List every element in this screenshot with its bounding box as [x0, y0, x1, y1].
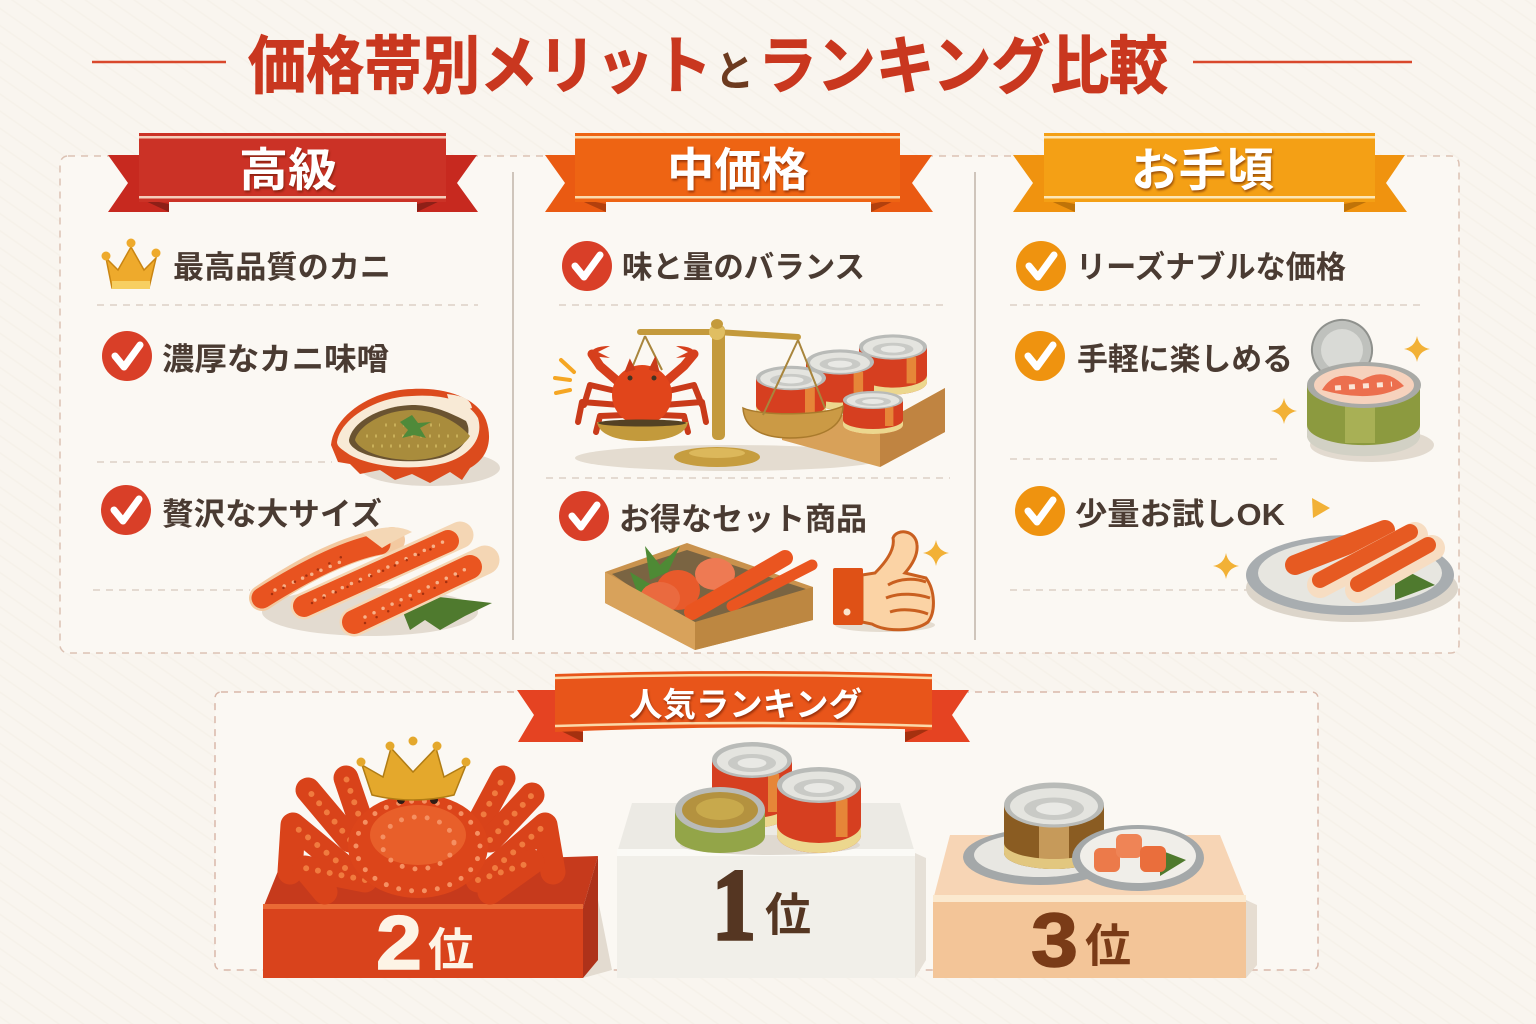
ribbon: 中価格	[545, 133, 933, 212]
panel: price tiers	[60, 156, 1459, 653]
ribbon: 中価格: 中価格	[667, 144, 809, 196]
podium: 3位: 3	[1031, 898, 1078, 983]
title	[92, 32, 1412, 102]
podium: 2位: 位	[428, 924, 474, 976]
item: 贅沢な大サイズ: 贅沢な大サイズ	[162, 497, 382, 532]
panel: ranking	[215, 692, 1318, 970]
item: 贅沢な大サイズ	[101, 485, 382, 535]
icon: sparkle	[1213, 553, 1239, 579]
title: 価格帯別メリット	[248, 32, 712, 102]
podium: 1位	[617, 803, 926, 978]
icon: thumbs up	[833, 532, 935, 632]
icon: arrow marker	[1312, 498, 1330, 518]
box of cans	[782, 334, 945, 467]
item: お得なセット商品	[559, 491, 867, 541]
item: リーズナブルな価格: リーズナブルな価格	[1076, 250, 1346, 285]
title: と	[715, 48, 754, 95]
illustration: king crab legs	[262, 527, 492, 636]
icon: sparkle	[1271, 398, 1297, 424]
item: 少量お試しOK	[1015, 486, 1286, 536]
podium: 2位: 2	[376, 901, 422, 986]
podium: 2位	[263, 856, 612, 986]
podium: 1位: 位	[765, 889, 811, 941]
item: 味と量のバランス: 味と量のバランス	[622, 250, 865, 285]
illustration: crab shell with miso	[331, 389, 500, 486]
icon: sparkle	[1404, 336, 1430, 362]
item: 濃厚なカニ味噌	[102, 331, 389, 381]
ribbon: 人気ランキング	[517, 671, 970, 742]
small crab	[578, 346, 706, 432]
item: リーズナブルな価格	[1016, 241, 1346, 291]
item: 最高品質のカニ	[102, 238, 391, 289]
icon: sparkle	[923, 540, 949, 566]
title: ランキング比較	[758, 32, 1168, 102]
illustration: set box of crab	[605, 543, 813, 650]
illustration: open crab can	[1302, 310, 1434, 462]
illustration: can and plates	[963, 782, 1204, 891]
item: 最高品質のカニ: 最高品質のカニ	[173, 250, 391, 285]
item: 手軽に楽しめる	[1015, 331, 1293, 381]
ribbon: お手頃	[1013, 133, 1407, 212]
podium: 3位: 位	[1085, 920, 1131, 972]
ribbon: お手頃: お手頃	[1131, 144, 1274, 196]
illustration: king crab with crown	[290, 736, 553, 898]
illustration: balance scale with crab and cans	[555, 319, 945, 471]
item: 手軽に楽しめる: 手軽に楽しめる	[1077, 342, 1293, 377]
podium: 1位: 1	[712, 849, 756, 962]
item: 濃厚なカニ味噌: 濃厚なカニ味噌	[162, 342, 389, 377]
item: 少量お試しOK: 少量お試しOK	[1075, 497, 1286, 532]
ribbon: 高級	[108, 133, 478, 212]
ribbon: 高級: 高級	[239, 144, 337, 196]
ribbon: 人気ランキング: 人気ランキング	[629, 686, 862, 723]
item: 味と量のバランス	[562, 241, 865, 291]
podium: 3位	[933, 835, 1257, 983]
illustration: ranked cans	[675, 742, 861, 855]
item: お得なセット商品: お得なセット商品	[619, 502, 867, 537]
illustration: plate of crab legs	[1246, 530, 1458, 622]
